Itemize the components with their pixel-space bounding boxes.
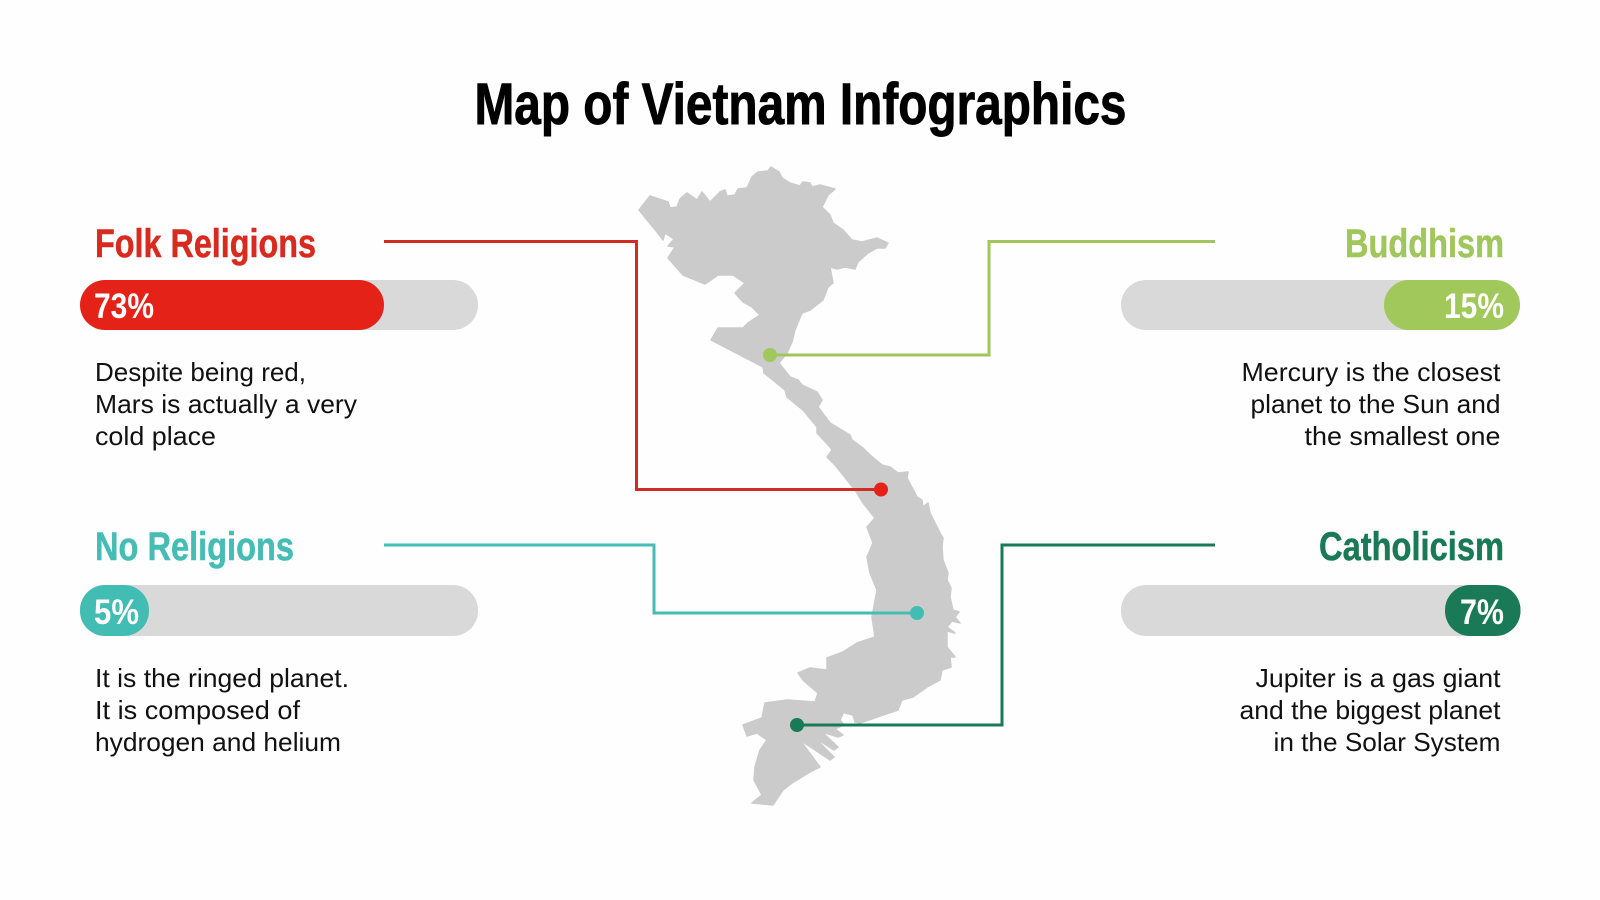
panel: No Religions [80, 525, 478, 757]
connector: Folk Religions [384, 242, 888, 496]
progress bar 7%: 7% [1460, 593, 1504, 632]
description: Jupiter is a gas giant [1256, 663, 1501, 693]
progress bar 15%: 15% [1444, 287, 1504, 326]
connector: Buddhism [763, 242, 1215, 362]
panel: Buddhism [1121, 222, 1520, 451]
title: Map of Vietnam Infographics [474, 72, 1126, 137]
description: the smallest one [1304, 421, 1500, 451]
heading: Folk Religions: Folk Religions [95, 222, 316, 266]
description: planet to the Sun and [1250, 389, 1500, 419]
description [95, 357, 357, 451]
heading: Catholicism: Catholicism [1319, 525, 1504, 569]
progress bar 5% [80, 585, 478, 636]
description [1240, 663, 1501, 757]
progress bar 7% [1121, 585, 1520, 636]
description: and the biggest planet [1240, 695, 1501, 725]
description [1242, 357, 1501, 451]
description: It is composed of [95, 695, 301, 725]
description: Mars is actually a very [95, 389, 357, 419]
panel: Catholicism [1121, 525, 1520, 757]
description: hydrogen and helium [95, 727, 341, 757]
heading: Buddhism: Buddhism [1345, 222, 1504, 266]
panel: Folk Religions [80, 222, 478, 451]
connector: No Religions [384, 545, 924, 620]
description: Despite being red, [95, 357, 306, 387]
description: It is the ringed planet. [95, 663, 349, 693]
description: in the Solar System [1274, 727, 1500, 757]
map of Vietnam [639, 167, 960, 805]
description: Mercury is the closest [1242, 357, 1501, 387]
progress bar 73% [80, 280, 478, 330]
connector: Catholicism [790, 545, 1215, 732]
description: cold place [95, 421, 216, 451]
description [95, 663, 349, 757]
progress bar 15% [1121, 280, 1520, 330]
heading: No Religions: No Religions [95, 525, 294, 569]
progress bar 5%: 5% [94, 593, 139, 632]
progress bar 73%: 73% [94, 287, 154, 326]
